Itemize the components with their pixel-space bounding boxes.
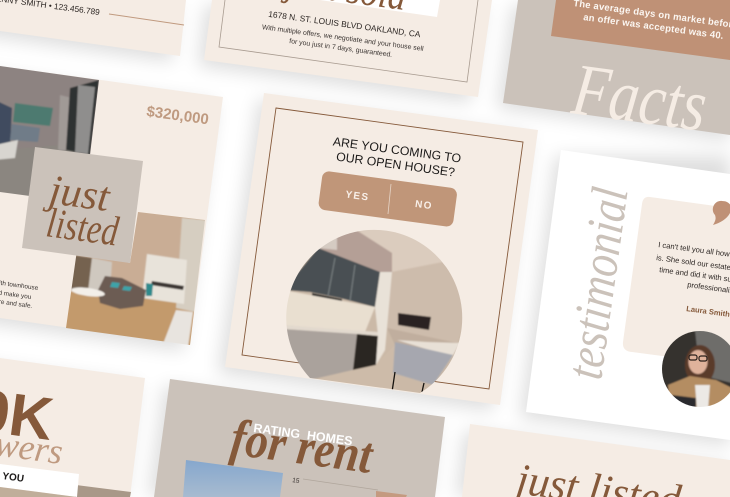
panel: just sold card: [204, 0, 492, 97]
photo strip: [75, 485, 131, 497]
poll button: YES: [345, 189, 370, 204]
chart gridline: [303, 479, 378, 490]
chart label: 15: [292, 477, 300, 485]
question: [332, 134, 462, 180]
script heading: just: [42, 167, 114, 221]
price: $320,000: [145, 103, 210, 128]
heading: RATING HOMES: [253, 421, 353, 448]
script heading: [42, 167, 122, 256]
panel: rating homes for rent card: [154, 379, 445, 497]
photo: lobby: [0, 66, 99, 196]
taupe title box: [22, 147, 143, 263]
script heading: testimonial: testimonial: [556, 184, 640, 383]
photo: sky: [183, 460, 283, 497]
inner border: [242, 108, 523, 389]
quote mark: [713, 201, 730, 225]
portrait: [660, 330, 730, 410]
panel: facts card: [503, 0, 730, 148]
poll button: NO: [414, 199, 433, 212]
body copy: With multiple offers, we negotiate and your house sell: [261, 24, 424, 53]
body copy: for you just in 7 days, guaranteed.: [289, 38, 393, 59]
photo: kitchen in a circle: [280, 225, 465, 397]
inner border: [219, 0, 478, 82]
white title box: [310, 0, 440, 17]
panel: followers card: [0, 358, 145, 497]
address: 1678 N. ST. LOUIS BLVD OAKLAND, CA: [268, 9, 422, 39]
photo: living room: [66, 212, 205, 345]
stat copy: an offer was accepted was 40.: [583, 12, 724, 42]
question: OUR OPEN HOUSE?: [335, 150, 456, 180]
script heading: listed: [44, 200, 122, 256]
chart bar: [376, 491, 407, 497]
panel: just listed card: [0, 60, 223, 350]
panel: testimonial card: [526, 150, 730, 440]
description: [0, 279, 39, 310]
white label: [0, 464, 79, 497]
photo under label: [0, 487, 77, 497]
brown stat box: [551, 0, 730, 60]
label text: YOU: [2, 471, 25, 485]
poll button: [318, 170, 458, 227]
question: ARE YOU COMING TO: [332, 134, 462, 166]
panel: bottom right just listed card: [462, 424, 730, 497]
script heading: for rent: for rent: [227, 409, 377, 485]
quote bubble: [623, 197, 730, 365]
panel: top-left contact card: [0, 0, 186, 56]
accent rule: [109, 14, 184, 25]
quote text: [656, 240, 730, 296]
panel: open house poll card: [225, 93, 538, 405]
